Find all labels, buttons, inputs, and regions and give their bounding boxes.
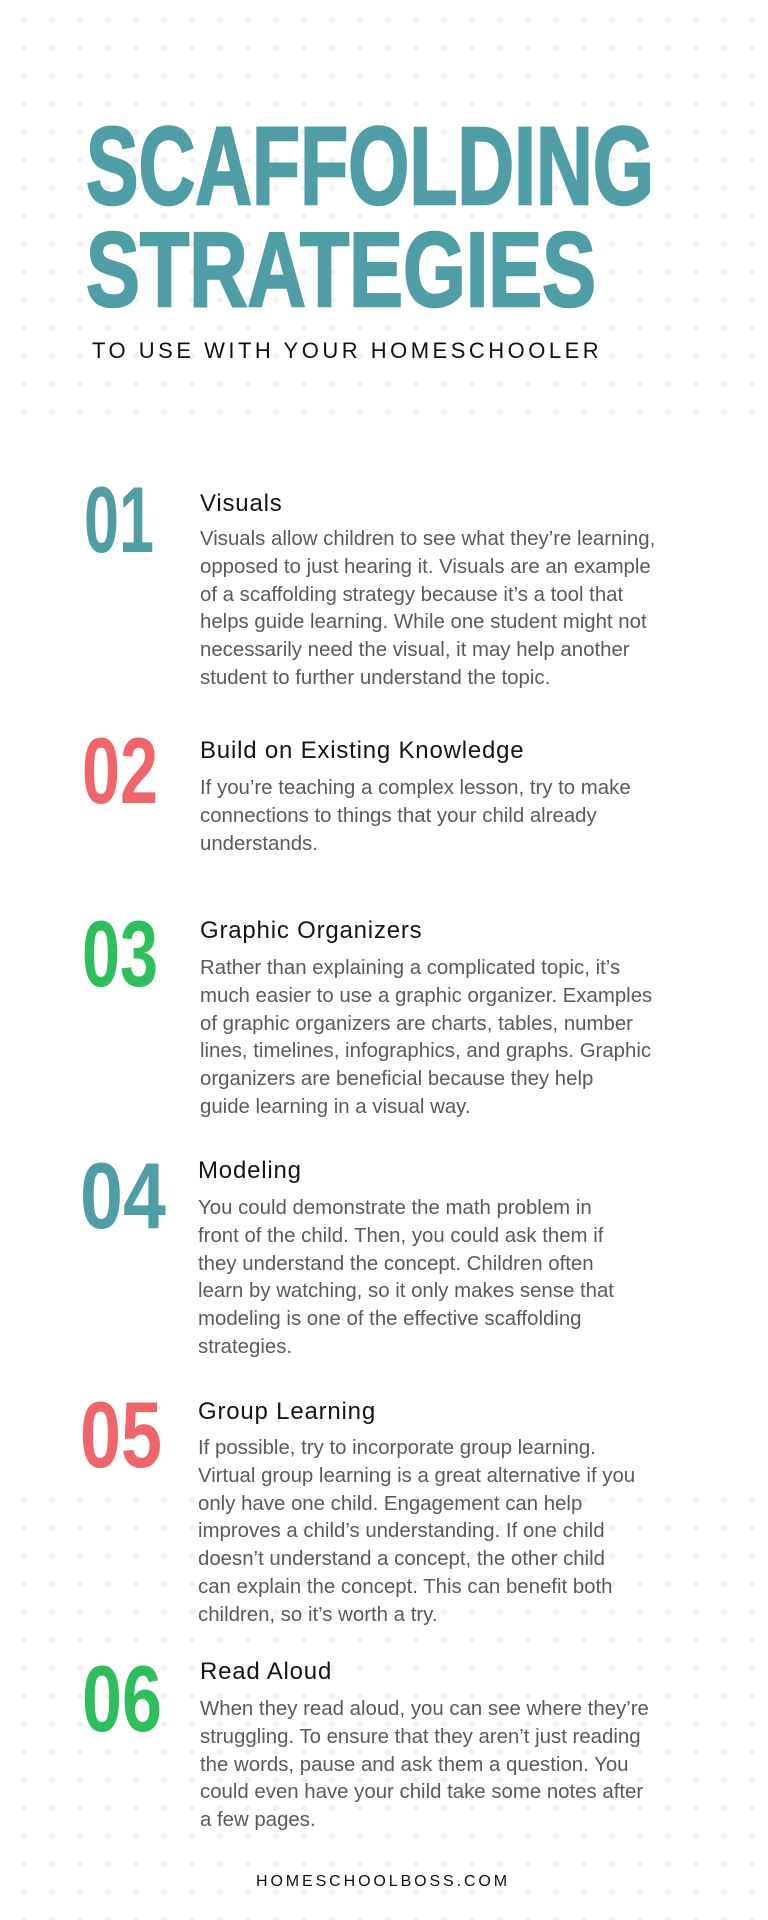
section 04 bbox=[80, 1153, 614, 1358]
body: strategies. bbox=[198, 1336, 292, 1358]
body: You could demonstrate the math problem in bbox=[198, 1197, 592, 1219]
body: doesn’t understand a concept, the other child bbox=[198, 1548, 605, 1570]
body: learn by watching, so it only makes sense that bbox=[198, 1280, 614, 1302]
body: improves a child’s understanding. If one child bbox=[198, 1520, 605, 1542]
body: struggling. To ensure that they aren’t just reading bbox=[200, 1726, 641, 1748]
body: lines, timelines, infographics, and graphs. Graphic bbox=[200, 1040, 651, 1062]
body bbox=[200, 1698, 649, 1831]
body bbox=[200, 957, 652, 1118]
body: If possible, try to incorporate group learning. bbox=[198, 1437, 596, 1459]
body: student to further understand the topic. bbox=[200, 667, 550, 689]
body: connections to things that your child already bbox=[200, 805, 597, 827]
body: Rather than explaining a complicated topic, it’s bbox=[200, 957, 620, 979]
body: modeling is one of the effective scaffolding bbox=[198, 1308, 582, 1330]
section 01 bbox=[84, 480, 655, 689]
body: If you’re teaching a complex lesson, try to make bbox=[200, 777, 631, 799]
body: When they read aloud, you can see where they’re bbox=[200, 1698, 649, 1720]
body bbox=[198, 1437, 635, 1626]
body: they understand the concept. Children often bbox=[198, 1253, 594, 1275]
body: opposed to just hearing it. Visuals are an example bbox=[200, 556, 651, 578]
body: guide learning in a visual way. bbox=[200, 1096, 471, 1118]
title: STRATEGIES bbox=[86, 211, 596, 329]
heading: Read Aloud bbox=[200, 1658, 332, 1685]
body: front of the child. Then, you could ask them if bbox=[198, 1225, 603, 1247]
body bbox=[200, 528, 655, 689]
body: children, so it’s worth a try. bbox=[198, 1604, 438, 1626]
body: the words, pause and ask them a question. You bbox=[200, 1754, 629, 1776]
body: much easier to use a graphic organizer. Examples bbox=[200, 985, 652, 1007]
heading: Graphic Organizers bbox=[200, 917, 422, 944]
body: understands. bbox=[200, 833, 318, 855]
body: only have one child. Engagement can help bbox=[198, 1493, 582, 1515]
body bbox=[200, 777, 631, 855]
body: could even have your child take some notes after bbox=[200, 1781, 643, 1803]
heading: Build on Existing Knowledge bbox=[200, 737, 524, 764]
body: helps guide learning. While one student might not bbox=[200, 611, 647, 633]
heading: Visuals bbox=[200, 490, 283, 517]
body bbox=[198, 1197, 614, 1358]
body: organizers are beneficial because they help bbox=[200, 1068, 593, 1090]
heading: Modeling bbox=[198, 1157, 302, 1184]
section 02 bbox=[82, 729, 631, 855]
subtitle: TO USE WITH YOUR HOMESCHOOLER bbox=[92, 338, 602, 363]
body: Virtual group learning is a great alternative if you bbox=[198, 1465, 635, 1487]
body: can explain the concept. This can benefit both bbox=[198, 1576, 613, 1598]
body: a few pages. bbox=[200, 1809, 316, 1831]
title bbox=[86, 105, 654, 329]
body: necessarily need the visual, it may help another bbox=[200, 639, 630, 661]
body: Visuals allow children to see what they’re learning, bbox=[200, 528, 655, 550]
body: of graphic organizers are charts, tables, number bbox=[200, 1013, 633, 1035]
heading: Group Learning bbox=[198, 1398, 376, 1425]
section 03 bbox=[82, 911, 652, 1118]
section 05 bbox=[80, 1392, 635, 1626]
section 06 bbox=[82, 1656, 649, 1831]
body: of a scaffolding strategy because it’s a tool that bbox=[200, 584, 623, 606]
footer: HOMESCHOOLBOSS.COM bbox=[256, 1873, 510, 1890]
